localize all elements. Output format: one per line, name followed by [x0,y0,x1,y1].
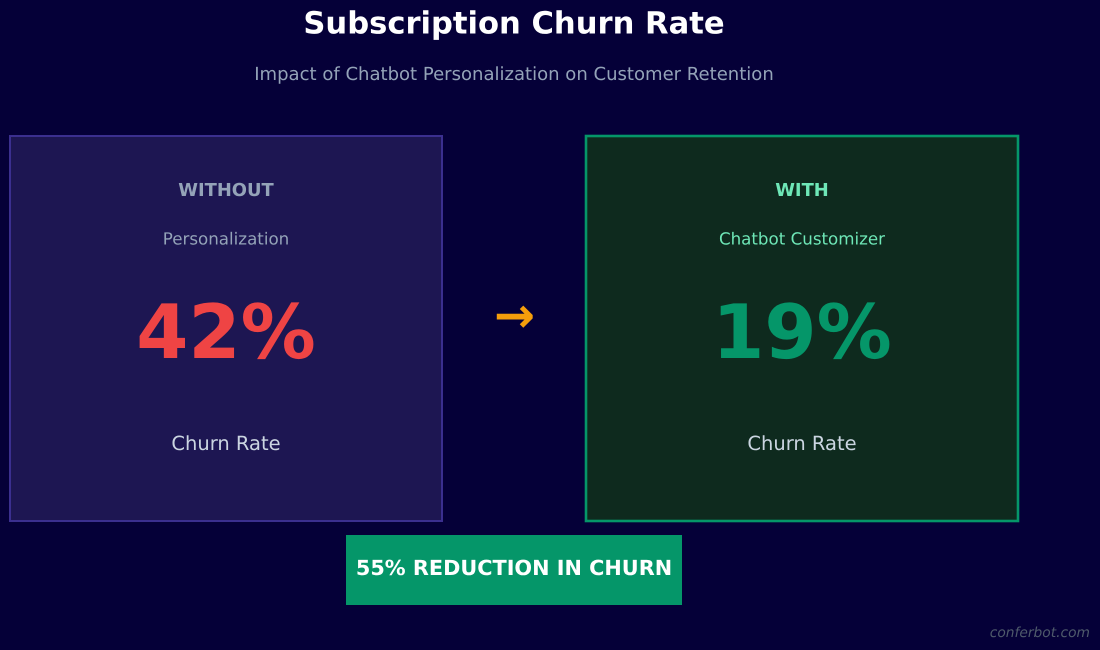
label: with: WITH [775,180,829,201]
watermark: conferbot.com [990,625,1090,641]
sublabel: personalization: Personalization [163,228,289,248]
title: Subscription Churn Rate [303,6,725,42]
subtitle: Impact of Chatbot Personalization on Customer Retention [254,64,774,85]
stat: 19 percent: 19% [712,288,892,376]
stat: 42 percent: 42% [136,288,316,376]
sublabel: chatbot customizer: Chatbot Customizer [719,228,885,248]
panel: without personalization [10,136,442,521]
callout: reduction banner [346,535,682,605]
caption: churn rate: Churn Rate [171,432,281,455]
label: without: WITHOUT [178,180,275,201]
caption: churn rate: Churn Rate [747,432,857,455]
callout text: 55% REDUCTION IN CHURN [356,556,672,580]
arrow: → [494,287,535,344]
panel: with chatbot customizer [586,136,1018,521]
